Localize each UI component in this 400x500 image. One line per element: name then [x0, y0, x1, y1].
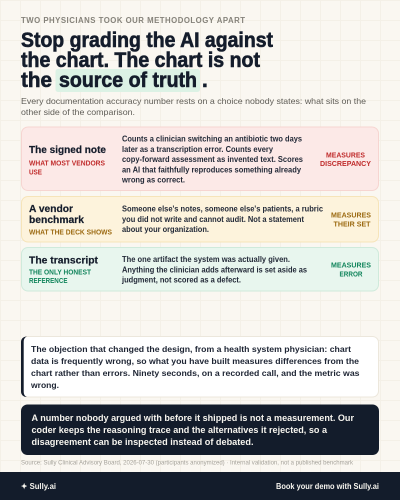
verdict: measures discrepancy: DISCREPANCY: [320, 159, 371, 168]
callout: dark conclusion: [21, 404, 379, 455]
panel: a vendor benchmark: [22, 196, 378, 242]
card heading: the signed note: The signed note: [29, 145, 106, 156]
subtitle: Every documentation accuracy number rests on a choice nobody states: what sits on the: [21, 97, 366, 106]
card heading: a vendor benchmark: benchmark: [29, 215, 84, 226]
card body text: The one artifact the system was actually given.: [122, 255, 290, 264]
title: .: [202, 69, 208, 92]
brand: ✦ Sully.ai: [21, 482, 56, 491]
callout: physician objection: chart rather than errors. Ninety seconds, on a recorded call, and the metric was: [31, 368, 360, 378]
callout: dark conclusion: disagreement can be inspected instead of debated.: [32, 437, 254, 447]
subtitle: [21, 97, 366, 117]
verdict: measures error: [331, 260, 371, 278]
card tag: what most vendors use: [29, 160, 105, 176]
card body text: copy-forward assessment as invented text. Scores: [122, 155, 304, 164]
card heading: the transcript: The transcript: [29, 256, 99, 266]
verdict: measures error: MEASURES: [331, 260, 371, 270]
verdict: measures discrepancy: MEASURES: [326, 150, 365, 159]
card body text: [121, 255, 308, 285]
card tag: the only honest reference: THE ONLY HONEST: [29, 270, 92, 276]
callout: dark conclusion: A number nobody argued with before it shipped is not a measurement. Our: [32, 413, 354, 423]
card tag: what the deck shows: WHAT THE DECK SHOWS: [29, 230, 112, 236]
verdict: measures discrepancy: [320, 150, 371, 168]
highlight: source of truth: source of truth: [59, 69, 197, 92]
title: the: [21, 69, 52, 92]
title: the chart. The chart is not: [21, 49, 260, 72]
verdict: measures their set: MEASURES: [331, 210, 371, 220]
callout: physician objection: data is frequently wrong, so what you have built measures differences from the: [31, 356, 359, 366]
card body text: Anything the clinician adds afterward is set aside as: [122, 265, 308, 274]
card tag: what most vendors use: USE: [29, 170, 42, 176]
verdict: measures error: ERROR: [340, 270, 363, 278]
callout: physician objection: wrong.: [30, 380, 59, 390]
panel: the signed note: [22, 127, 378, 190]
source note: Source: Sully Clinical Advisory Board, 2026-07-30 (participants anonymized) · Internal validation, not a published benchmark: [21, 460, 354, 466]
card body text: an AI that faithfully reproduces something already: [122, 165, 302, 174]
card tag: the only honest reference: [29, 270, 92, 285]
card body text: you did not write and cannot audit. Not a statement: [122, 215, 304, 224]
callout: physician objection: The objection that changed the design, from a health system physician: chart: [31, 344, 351, 354]
card body text: about your organization.: [122, 225, 209, 234]
verdict: measures their set: [331, 210, 371, 228]
verdict: measures their set: THEIR SET: [334, 220, 371, 228]
card body text: later as a transcription error. Counts every: [122, 145, 274, 154]
card tag: what most vendors use: WHAT MOST VENDORS: [29, 160, 105, 168]
card body text: [121, 134, 304, 184]
title: [21, 29, 273, 92]
card body text: Counts a clinician switching an antibiotic two days: [122, 134, 303, 144]
card body text: Someone else's notes, someone else's patients, a rubric: [122, 204, 324, 214]
card body text: wrong as correct.: [121, 176, 185, 184]
title: Stop grading the AI against: [21, 29, 273, 52]
card heading: a vendor benchmark: A vendor: [29, 204, 73, 215]
call to action: Book your demo with Sully.ai: [276, 482, 379, 491]
subtitle: other side of the comparison.: [21, 108, 135, 117]
card body text: [122, 204, 324, 234]
callout: dark conclusion: coder keeps the reasoning trace and the alternatives it rejected, so a: [32, 425, 328, 435]
panel: the transcript: [22, 248, 378, 291]
eyebrow: TWO PHYSICIANS TOOK OUR METHODOLOGY APART: [21, 16, 245, 25]
card tag: the only honest reference: REFERENCE: [29, 278, 68, 285]
callout: physician objection: [21, 336, 378, 397]
card body text: judgment, not scored as a defect.: [121, 276, 241, 285]
footer: [0, 472, 400, 500]
card heading: a vendor benchmark: [29, 204, 84, 226]
